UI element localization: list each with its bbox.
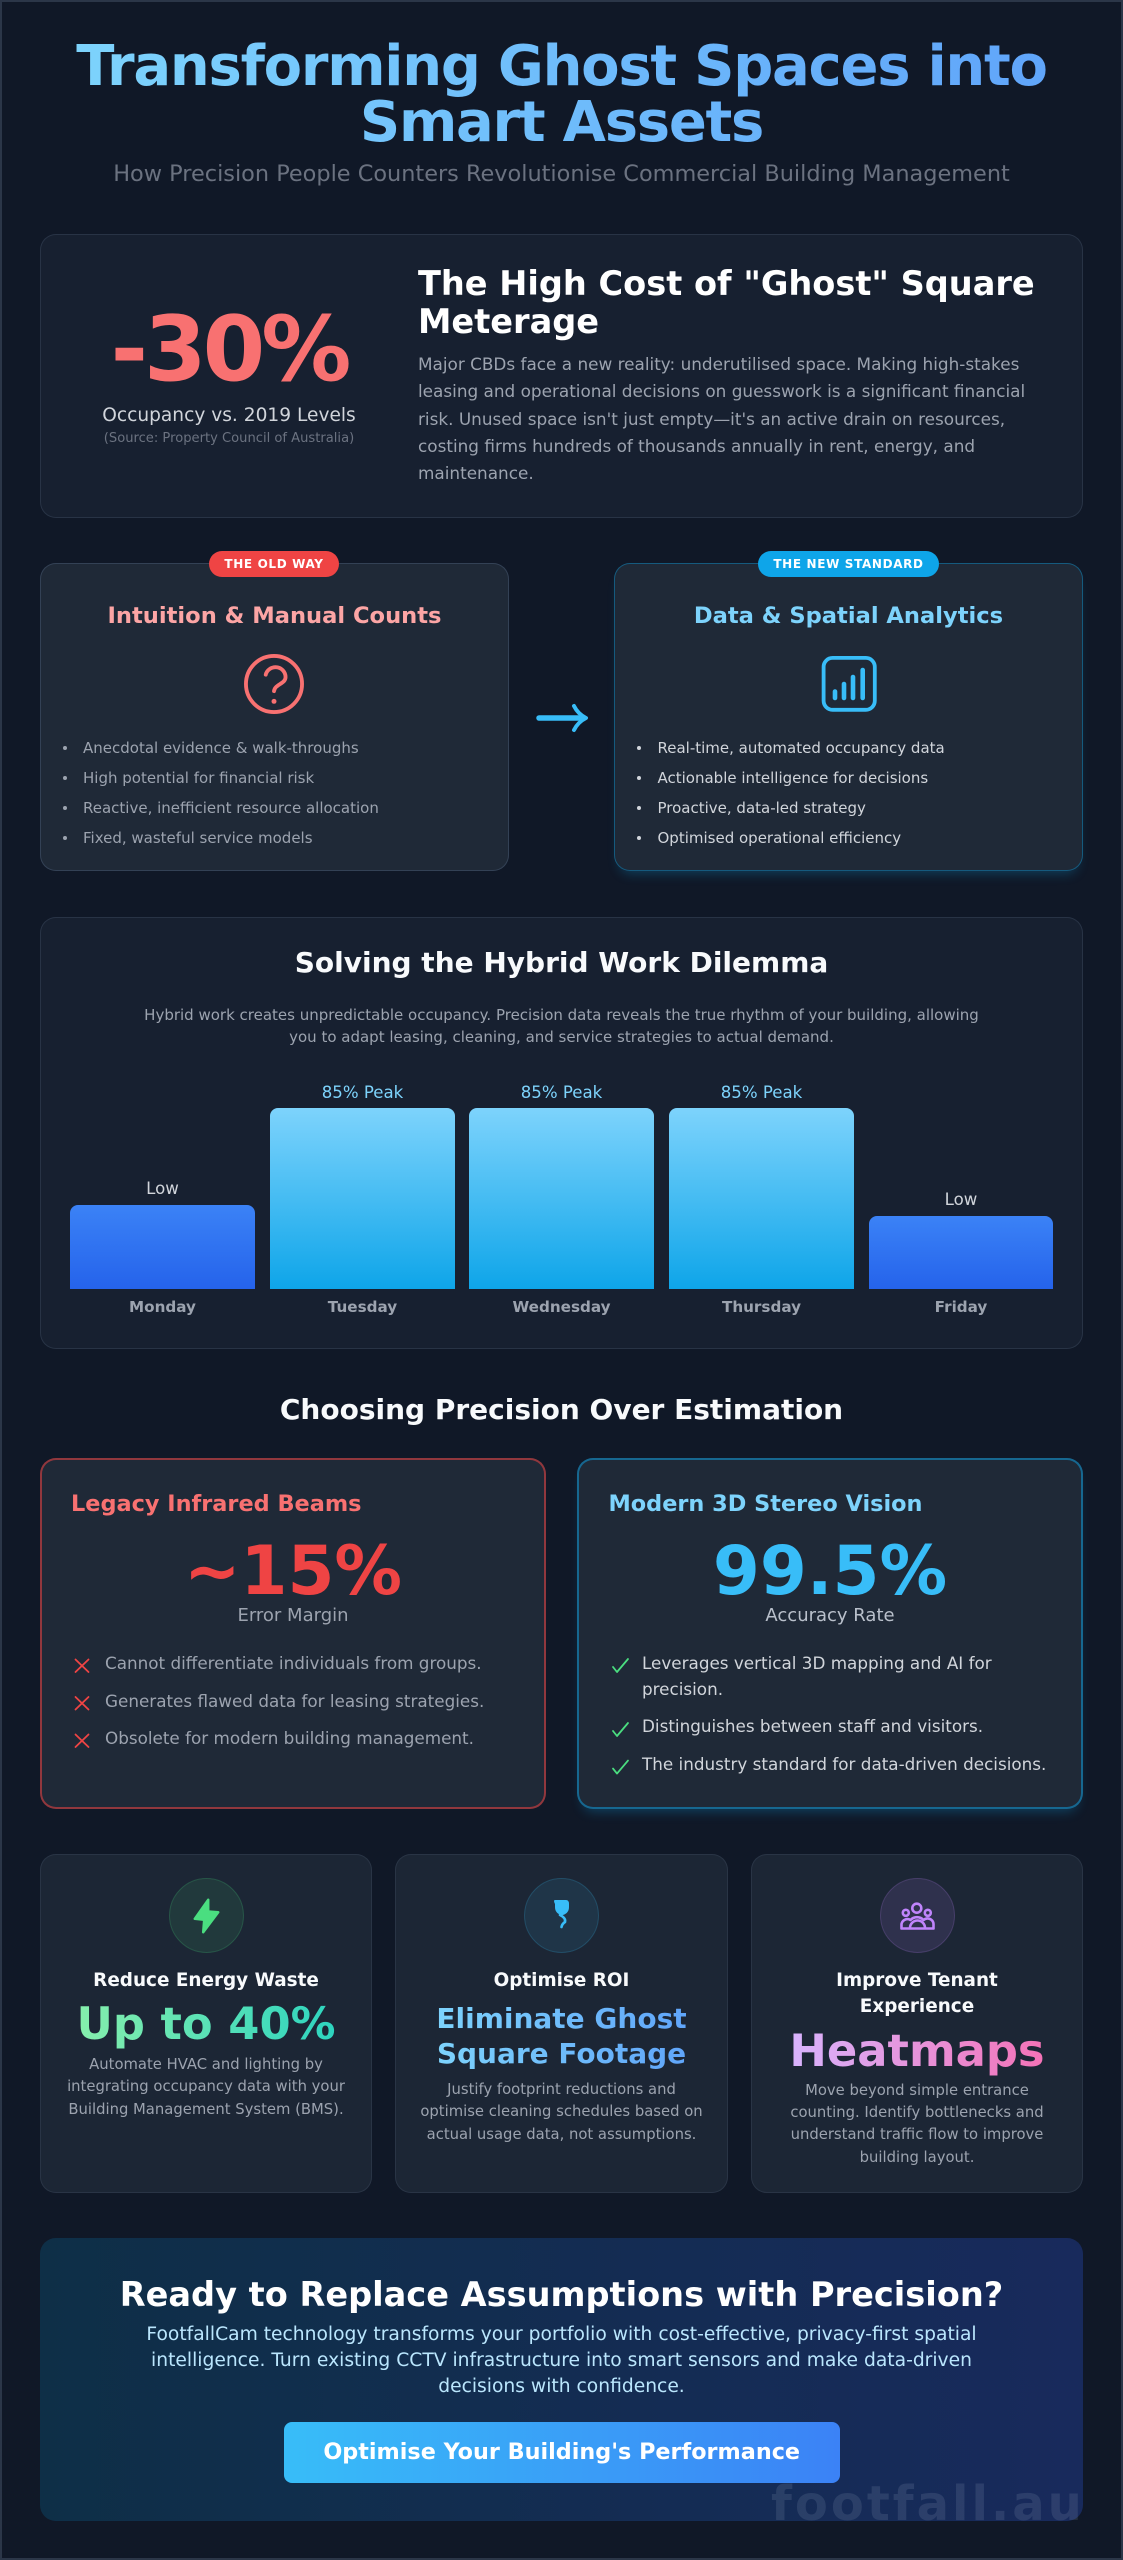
icon: blob with tail xyxy=(524,1878,599,1953)
list: Optimised operational efficiency xyxy=(658,828,901,846)
body text xyxy=(146,2324,977,2397)
panel: the old way xyxy=(40,563,509,871)
description xyxy=(67,2056,345,2118)
icon: lightning bolt xyxy=(169,1878,244,1953)
bar: Thursday: Thursday xyxy=(722,1298,801,1316)
badge: THE NEW STANDARD xyxy=(773,557,924,571)
heading: Legacy Infrared Beams xyxy=(71,1491,362,1517)
body text: costing firms hundreds of thousands annually in rent, energy, and xyxy=(418,436,975,456)
bar: Wednesday: 85% Peak xyxy=(521,1082,602,1102)
description xyxy=(144,1006,979,1046)
title: Smart Assets xyxy=(360,90,763,155)
list: Generates flawed data for leasing strategies. xyxy=(105,1691,484,1711)
title: Transforming Ghost Spaces into xyxy=(76,34,1047,99)
description: Automate HVAC and lighting by xyxy=(89,2056,323,2073)
list: Anecdotal evidence & walk-throughs xyxy=(83,738,359,756)
body text: leasing and operational decisions on guesswork is a significant financial xyxy=(418,381,1025,401)
panel: modern 3D stereo vision xyxy=(577,1458,1083,1809)
stat: ~15% xyxy=(184,1531,402,1610)
body text: intelligence. Turn existing CCTV infrastructure into smart sensors and make data-driven xyxy=(151,2350,972,2371)
panel: reduce energy waste xyxy=(40,1854,372,2193)
description: optimise cleaning schedules based on xyxy=(420,2103,703,2120)
benefit title: Reduce Energy Waste xyxy=(93,1970,319,1991)
bar: Wednesday: Wednesday xyxy=(512,1298,611,1316)
button xyxy=(284,2422,840,2483)
panel: call to action xyxy=(40,2238,1083,2521)
panel: optimise ROI xyxy=(395,1854,728,2193)
stat: Eliminate Ghost xyxy=(436,2002,687,2035)
heading: Meterage xyxy=(418,302,599,340)
benefit title xyxy=(836,1970,998,2017)
arrow xyxy=(536,704,588,732)
bar: Monday xyxy=(70,1179,255,1316)
body text: maintenance. xyxy=(418,463,534,483)
bar: Thursday xyxy=(669,1082,854,1316)
stat: Heatmaps xyxy=(789,2024,1045,2076)
stat: 99.5% xyxy=(713,1531,947,1610)
description xyxy=(790,2082,1044,2166)
icon: people group xyxy=(880,1878,955,1953)
section heading: Choosing Precision Over Estimation xyxy=(280,1393,843,1426)
bar: Friday xyxy=(869,1190,1053,1316)
body text: Major CBDs face a new reality: underutilised space. Making high-stakes xyxy=(418,354,1019,374)
bar: Friday: Low xyxy=(945,1190,977,1209)
list xyxy=(612,1653,1046,1774)
list: precision. xyxy=(642,1679,723,1699)
icon: question mark xyxy=(244,654,304,714)
description xyxy=(420,2081,703,2143)
list: Proactive, data-led strategy xyxy=(658,798,866,816)
list xyxy=(63,738,379,846)
bar: Thursday: 85% Peak xyxy=(721,1082,802,1102)
list: Real-time, automated occupancy data xyxy=(658,738,945,756)
description: you to adapt leasing, cleaning, and service strategies to actual demand. xyxy=(289,1028,834,1046)
body text xyxy=(418,354,1025,483)
description: integrating occupancy data with your xyxy=(67,2078,345,2095)
list: High potential for financial risk xyxy=(83,768,314,786)
heading: The High Cost of "Ghost" Square xyxy=(418,264,1035,302)
badge: THE OLD WAY xyxy=(224,557,324,571)
panel: improve tenant experience xyxy=(751,1854,1083,2193)
heading: Modern 3D Stereo Vision xyxy=(608,1491,922,1517)
list: Obsolete for modern building management. xyxy=(105,1728,474,1748)
heading xyxy=(418,264,1035,340)
list: Actionable intelligence for decisions xyxy=(658,768,928,786)
description: Hybrid work creates unpredictable occupancy. Precision data reveals the true rhythm of your building, allowing xyxy=(144,1006,979,1024)
badge xyxy=(758,551,939,577)
bar: Tuesday: 85% Peak xyxy=(322,1082,403,1102)
badge xyxy=(209,551,339,577)
subtitle: How Precision People Counters Revolutionise Commercial Building Management xyxy=(113,161,1010,187)
bar: Friday: Friday xyxy=(935,1298,987,1316)
stat: Up to 40% xyxy=(76,1997,336,2050)
stat: Square Footage xyxy=(437,2037,686,2070)
watermark: footfall.au xyxy=(771,2476,1085,2532)
list: The industry standard for data-driven decisions. xyxy=(642,1754,1046,1774)
panel: cost of ghost square meterage xyxy=(40,234,1083,518)
stat label: Occupancy vs. 2019 Levels xyxy=(102,405,356,426)
bar: Tuesday: Tuesday xyxy=(328,1298,397,1316)
title xyxy=(76,34,1047,155)
bar chart xyxy=(70,1082,1053,1316)
bar: Monday: Monday xyxy=(129,1298,196,1316)
list: Fixed, wasteful service models xyxy=(83,828,313,846)
bar: Monday: Low xyxy=(146,1179,179,1198)
header xyxy=(76,34,1047,187)
stat label: Accuracy Rate xyxy=(765,1605,895,1626)
heading: Ready to Replace Assumptions with Precision? xyxy=(120,2275,1003,2314)
stat label: Error Margin xyxy=(237,1605,349,1626)
description: actual usage data, not assumptions. xyxy=(427,2126,696,2143)
list: Distinguishes between staff and visitors. xyxy=(642,1716,983,1736)
list xyxy=(74,1653,484,1748)
icon: bar chart square xyxy=(822,656,877,712)
heading: Solving the Hybrid Work Dilemma xyxy=(295,946,828,979)
bar: Tuesday xyxy=(270,1082,455,1316)
source note: (Source: Property Council of Australia) xyxy=(104,431,354,446)
bar: Wednesday xyxy=(469,1082,654,1316)
benefit title: Experience xyxy=(860,1996,974,2017)
panel: hybrid work xyxy=(40,917,1083,1349)
body text: decisions with confidence. xyxy=(438,2376,685,2397)
heading: Data & Spatial Analytics xyxy=(694,602,1003,628)
list xyxy=(637,738,945,846)
description: Building Management System (BMS). xyxy=(68,2101,344,2118)
list: Reactive, inefficient resource allocation xyxy=(83,798,379,816)
button: Optimise Your Building's Performance xyxy=(323,2439,800,2465)
list: Leverages vertical 3D mapping and AI for xyxy=(642,1653,992,1673)
body text: FootfallCam technology transforms your portfolio with cost-effective, privacy-first spatial xyxy=(146,2324,977,2345)
benefit title: Improve Tenant xyxy=(836,1970,998,1991)
stat: -30%: -30% xyxy=(111,297,347,402)
description: Justify footprint reductions and xyxy=(447,2081,676,2098)
description: building layout. xyxy=(860,2149,974,2166)
panel: legacy infrared beams xyxy=(40,1458,546,1809)
body text: risk. Unused space isn't just empty—it's an active drain on resources, xyxy=(418,409,1005,429)
stat xyxy=(436,2002,687,2070)
heading: Intuition & Manual Counts xyxy=(108,602,442,628)
description: counting. Identify bottlenecks and xyxy=(790,2104,1044,2121)
list: Cannot differentiate individuals from groups. xyxy=(105,1653,482,1673)
benefit title: Optimise ROI xyxy=(494,1970,629,1991)
panel: the new standard xyxy=(614,563,1083,871)
description: Move beyond simple entrance xyxy=(805,2082,1029,2098)
description: understand traffic flow to improve xyxy=(791,2126,1043,2143)
